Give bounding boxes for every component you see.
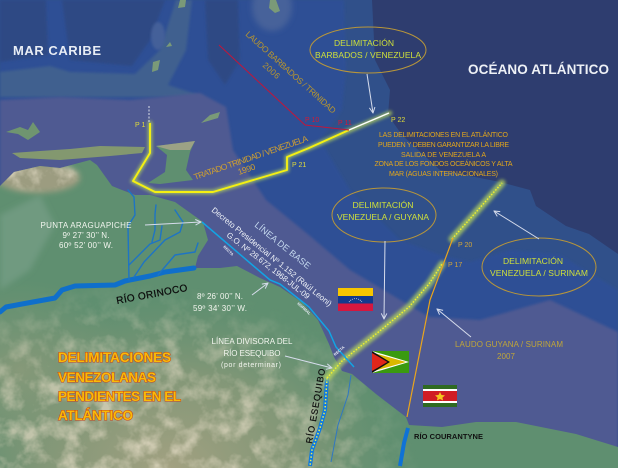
text: Laudo Guyana / Surinam: LAUDO GUYANA / SURINAM [455,340,563,349]
text: Línea divisora: (por determinar) [221,362,281,369]
ellipse: Barbados / Venezuela [310,27,426,73]
text: Línea divisora [212,337,293,369]
point labels: P 1 [135,122,145,129]
text: Atlantic statement: LAS DELIMITACIONES EN EL ATLÁNTICO [379,130,509,139]
ellipse: Venezuela / Surinam [482,238,596,296]
text: Punta Araguapiche: 60º 52’ 00’’ W. [59,241,113,250]
text: Línea divisora: LÍNEA DIVISORA DEL [212,337,293,346]
text: Punta Araguapiche: 9º 27’ 30’’ N. [62,231,110,240]
blue baseline [202,222,354,367]
land and terrain [0,155,618,468]
text: Laudo Guyana / Surinam: 2007 [497,352,516,361]
text: Laudo Barbados / Trinidad: LAUDO BARBADOS / TRINIDAD [244,29,338,115]
labels: Recta and Normal: RECTA [333,345,346,357]
red line laudo Barbados / Trinidad [219,45,349,130]
point labels: P 17 [448,262,462,269]
heading: Océano Atlántico: OCÉANO ATLÁNTICO [468,62,609,77]
point labels: P 10 [305,117,319,124]
main title: DELIMITACIONES [58,350,171,365]
flag: Venezuela [338,288,373,311]
point labels: P 20 [458,242,472,249]
ellipse: Venezuela / Guyana: VENEZUELA / GUYANA [337,212,429,222]
heading: Mar Caribe: MAR CARIBE [13,43,101,58]
text: Tratado Trinidad / Venezuela: 1990 [236,161,257,177]
ellipse: Venezuela / Guyana: DELIMITACIÓN [352,200,414,210]
white segment to P22 [349,113,389,130]
text: Atlantic statement: MAR (AGUAS INTERNACIONALES) [389,171,498,178]
labels: Recta and Normal [222,245,346,357]
text: Río Orinoco: RÍO ORINOCO [115,281,189,307]
text: Línea divisora: RÍO ESEQUIBO [224,349,280,358]
ellipse: Barbados / Venezuela: DELIMITACIÓN [334,38,394,48]
ellipse: Venezuela / Surinam: DELIMITACIÓN [503,256,563,266]
text: 8º coordinates [193,292,247,313]
text: Laudo Guyana / Surinam [455,340,563,361]
ellipse: Venezuela / Surinam: VENEZUELA / SURINAM [490,268,588,278]
ellipse: Barbados / Venezuela: BARBADOS / VENEZUELA [315,50,421,60]
point labels: P 21 [292,162,306,169]
dashed line above P1 [148,106,150,123]
labels: Recta and Normal: NORMAL [296,302,312,316]
text: Punta Araguapiche [40,221,132,250]
yellow boundary line Trinidad / Venezuela [133,123,349,192]
rivers: Orinoco and tributaries [0,190,198,312]
text: Línea de base: LÍNEA DE BASE [253,220,313,271]
river Esequibo and Courantyne [310,375,408,466]
text: Línea de base: G.O. Nº 28.672, 1968-JUL-09 [225,230,312,301]
orange line laudo Guyana / Surinam [407,238,453,417]
main title [58,350,181,423]
text: Laudo Barbados / Trinidad: 2006 [261,60,282,81]
text: Línea de base: Decreto Presidencial Nº 1.152 (Raúl Leoni) [210,206,334,308]
dotted line Venezuela / Guyana [327,264,442,378]
dotted line Venezuela / Surinam [452,183,502,239]
text: Atlantic statement: PUEDEN Y DEBEN GARANTIZAR LA LIBRE [378,142,509,149]
text: Tratado Trinidad / Venezuela: TRATADO TRINIDAD / VENEZUELA [192,133,309,182]
main title: ATLÁNTICO [58,408,133,423]
glow of delimitation lines [133,113,502,378]
Caribbean islands and Trinidad [6,0,280,184]
text: Río Courantyne: RÍO COURANTYNE [414,432,483,441]
text: Atlantic statement: ZONA DE LOS FONDOS OCEÁNICOS Y ALTA [374,159,513,168]
ellipse: Venezuela / Guyana [332,188,436,242]
flag: Guyana [372,351,409,373]
labels: Recta and Normal: RECTA [222,245,234,257]
main title: VENEZOLANAS [58,370,156,385]
text: Atlantic statement [374,130,513,178]
text: 8º coordinates: 8º 26’ 00’’ N. [197,292,243,301]
point labels: P 22 [391,117,405,124]
text: Atlantic statement: SALIDA DE VENEZUELA A [401,152,486,159]
text: Río Esequibo: RÍO ESEQUIBO [304,368,327,444]
arrows [145,74,539,368]
point labels [135,117,472,269]
point labels: P 11 [338,120,352,127]
text: Punta Araguapiche: PUNTA ARAGUAPICHE [40,221,132,230]
main title: PENDIENTES EN EL [58,389,181,404]
text: 8º coordinates: 59º 34’ 30’’ W. [193,304,247,313]
flag: Suriname [423,385,457,407]
